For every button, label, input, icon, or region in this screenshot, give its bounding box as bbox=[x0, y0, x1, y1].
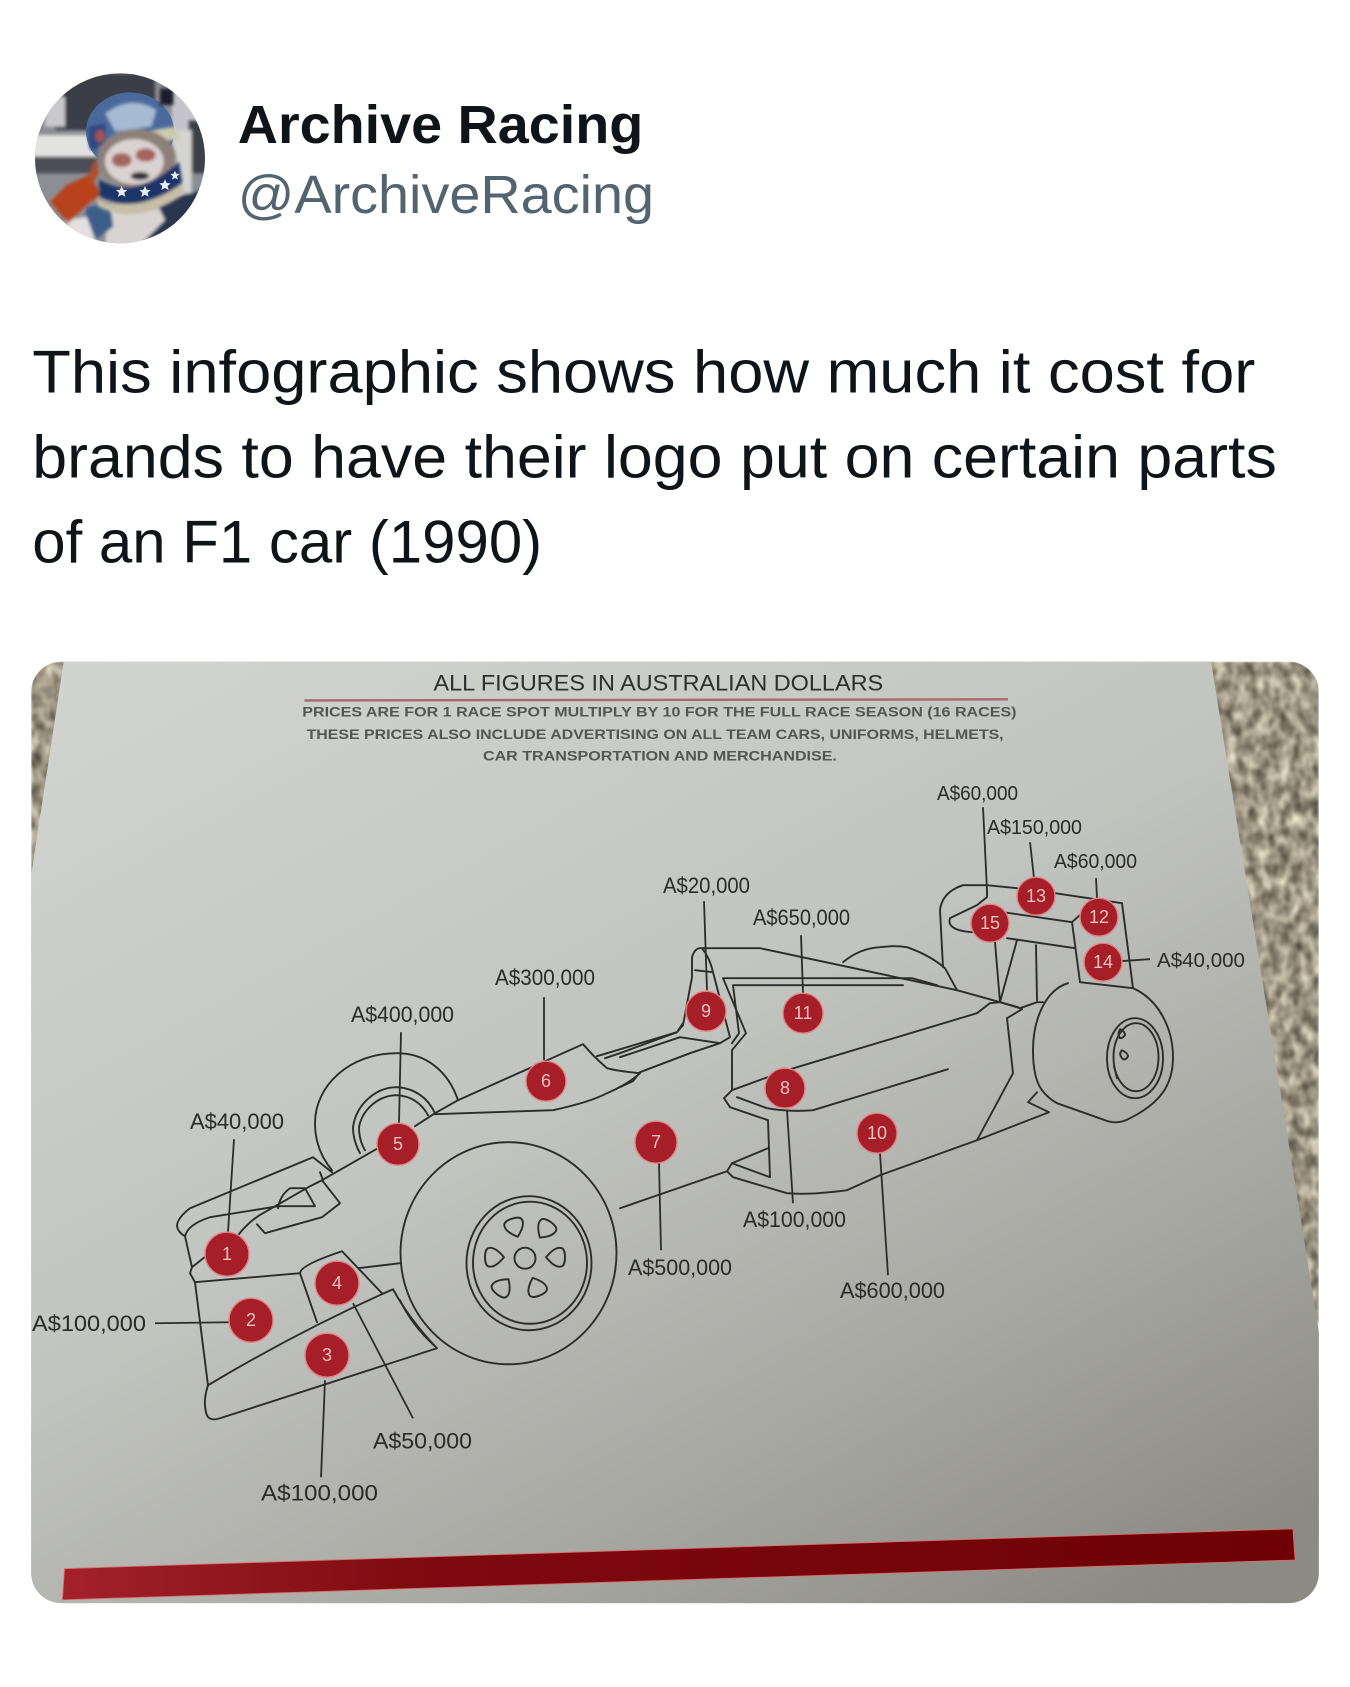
avatar: racing driver in helmet bbox=[32, 70, 212, 247]
red footer bar bbox=[62, 1529, 1295, 1600]
marker 8: 8 bbox=[780, 1078, 790, 1098]
numbered markers bbox=[205, 877, 1122, 1377]
rear wing bbox=[940, 885, 1133, 1002]
front wheel near bbox=[401, 1142, 617, 1364]
sidepod and floor bbox=[620, 1002, 1049, 1208]
car line drawing bbox=[177, 885, 1173, 1419]
sheet notes: PRICES ARE FOR 1 RACE SPOT MULTIPLY BY 10 FOR THE FULL RACE SEASON (16 RACES) bbox=[302, 704, 1017, 720]
cockpit and roll hoop bbox=[605, 948, 1018, 1090]
marker 3: 3 bbox=[322, 1345, 332, 1365]
marker 7: 7 bbox=[651, 1132, 661, 1152]
marker 1 bbox=[205, 1232, 249, 1276]
marker 14: 14 bbox=[1093, 952, 1113, 972]
price labels: A$60,000 bbox=[1054, 851, 1137, 873]
marker 1: 1 bbox=[222, 1244, 232, 1264]
helmet stars bbox=[116, 171, 180, 197]
price labels: A$40,000 bbox=[190, 1109, 284, 1134]
marker 15: 15 bbox=[980, 913, 1000, 933]
marker 4 bbox=[315, 1261, 359, 1305]
price labels: A$100,000 bbox=[32, 1311, 146, 1336]
marker 10: 10 bbox=[867, 1123, 887, 1143]
marker 4: 4 bbox=[332, 1273, 342, 1293]
marker 12: 12 bbox=[1089, 907, 1109, 927]
tweet text: of an F1 car (1990) bbox=[32, 508, 542, 576]
marker 2 bbox=[229, 1298, 273, 1342]
price labels: A$500,000 bbox=[628, 1255, 732, 1280]
engine cover bbox=[843, 946, 957, 990]
account handle: @ArchiveRacing bbox=[238, 165, 654, 225]
marker 11: 11 bbox=[794, 1003, 812, 1023]
sheet heading: ALL FIGURES IN AUSTRALIAN DOLLARS bbox=[434, 671, 883, 696]
marker 12 bbox=[1080, 898, 1118, 936]
monocoque top bbox=[415, 1023, 683, 1126]
tweet text: This infographic shows how much it cost for bbox=[32, 338, 1255, 406]
marker 6: 6 bbox=[541, 1071, 551, 1091]
price labels: A$600,000 bbox=[840, 1278, 945, 1303]
price labels: A$100,000 bbox=[261, 1480, 378, 1505]
price labels: A$650,000 bbox=[753, 905, 850, 930]
rear wheel bbox=[1033, 982, 1173, 1122]
paper sheet bbox=[27, 656, 1323, 1608]
front wing bbox=[185, 1236, 437, 1419]
tweet text bbox=[32, 338, 1277, 576]
marker 10 bbox=[857, 1113, 897, 1153]
marker 9: 9 bbox=[701, 1001, 711, 1021]
marker 5 bbox=[377, 1123, 419, 1165]
sheet notes: CAR TRANSPORTATION AND MERCHANDISE. bbox=[483, 748, 837, 764]
marker 5: 5 bbox=[393, 1134, 403, 1154]
marker 13 bbox=[1017, 877, 1055, 915]
price labels: A$150,000 bbox=[987, 817, 1082, 839]
leader lines bbox=[155, 807, 1150, 1477]
price labels: A$60,000 bbox=[937, 783, 1018, 805]
marker 6 bbox=[526, 1061, 566, 1101]
marker 2: 2 bbox=[246, 1310, 256, 1330]
tweet text: brands to have their logo put on certain parts bbox=[32, 423, 1277, 491]
price labels: A$40,000 bbox=[1157, 950, 1245, 972]
sheet notes bbox=[303, 706, 1016, 760]
F1 car diagram bbox=[32, 783, 1245, 1505]
marker 13: 13 bbox=[1026, 886, 1046, 906]
marker 11 bbox=[783, 993, 823, 1033]
price labels: A$400,000 bbox=[351, 1002, 454, 1027]
marker 15 bbox=[971, 904, 1009, 942]
nose cone bbox=[177, 1148, 378, 1236]
price labels: A$50,000 bbox=[373, 1428, 472, 1453]
price labels: A$20,000 bbox=[663, 873, 750, 898]
front wheel far bbox=[315, 1053, 458, 1170]
price labels: A$100,000 bbox=[743, 1207, 846, 1232]
marker 7 bbox=[635, 1121, 677, 1163]
marker 14 bbox=[1084, 943, 1122, 981]
price labels bbox=[32, 783, 1245, 1505]
account name: Archive Racing bbox=[238, 95, 643, 155]
carpet background bbox=[31, 662, 1319, 1603]
sheet notes: THESE PRICES ALSO INCLUDE ADVERTISING ON ALL TEAM CARS, UNIFORMS, HELMETS, bbox=[307, 726, 1004, 742]
price labels: A$300,000 bbox=[495, 965, 595, 990]
marker 8 bbox=[765, 1068, 805, 1108]
marker 3 bbox=[305, 1333, 349, 1377]
marker 9 bbox=[686, 991, 726, 1031]
panel: photo of price sheet bbox=[27, 656, 1323, 1608]
